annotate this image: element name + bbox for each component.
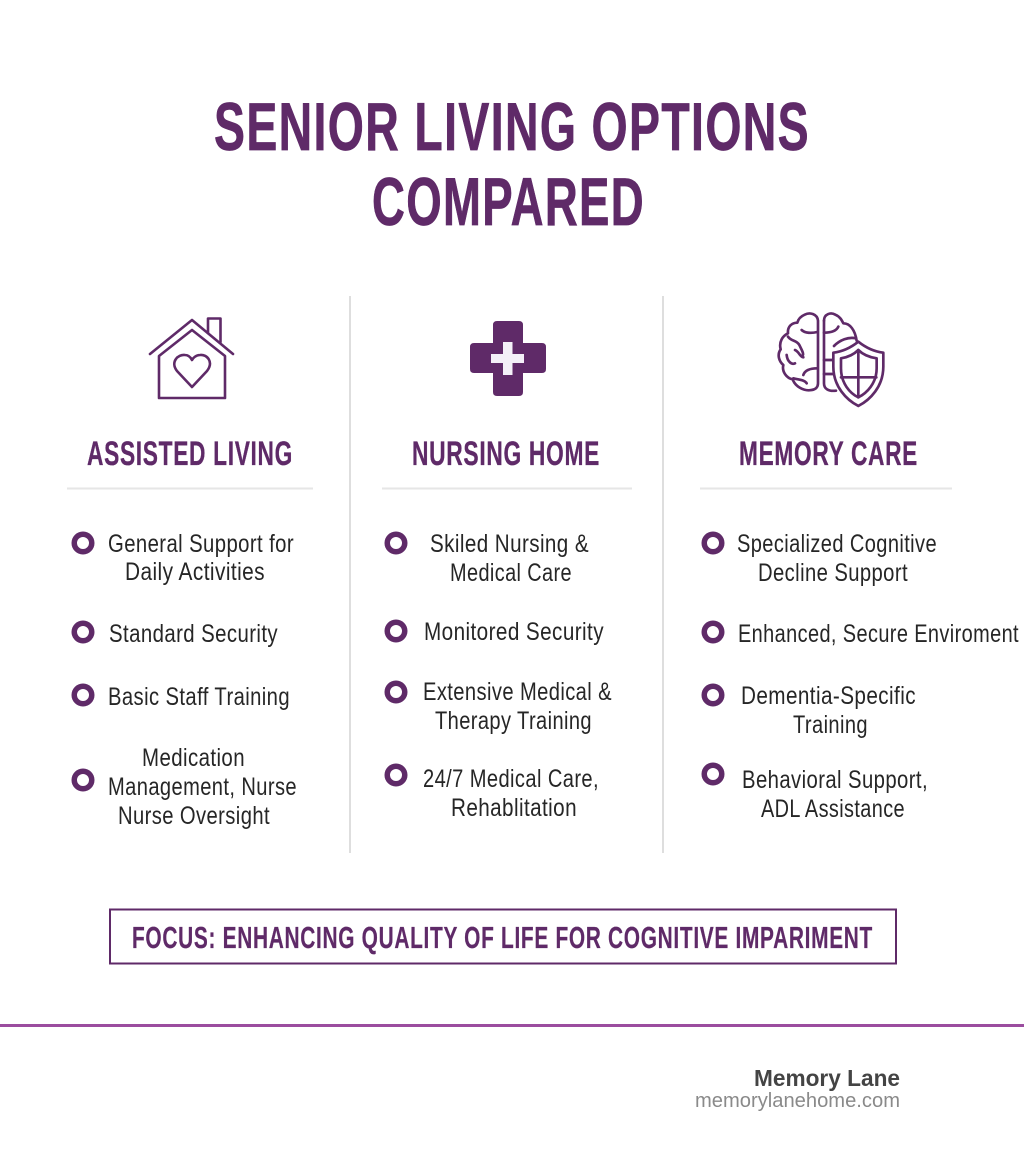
list item: medical care <box>387 765 599 822</box>
list item: behavioral support: ADL Assistance <box>761 795 905 823</box>
list item: dementia training <box>704 682 916 739</box>
title: COMPARED <box>372 164 645 240</box>
list item: behavioral support <box>704 765 928 823</box>
title <box>214 89 810 240</box>
list item: medical care: 24/7 Medical Care, <box>423 765 599 793</box>
list item: medication: Nurse Oversight <box>118 802 270 830</box>
list item: therapy training <box>387 678 612 735</box>
list item: medication: Management, Nurse <box>108 773 297 801</box>
list item: behavioral support: Behavioral Support, <box>742 766 928 794</box>
list item: skilled nursing: Medical Care <box>450 559 572 587</box>
list item: daily activities: General Support for <box>108 530 294 558</box>
list item: medication <box>74 744 297 830</box>
panel: assisted living <box>67 318 313 830</box>
list item: skilled nursing: Skiled Nursing & <box>430 530 589 558</box>
list item: skilled nursing <box>387 530 589 587</box>
footer brand: Memory Lane <box>754 1065 900 1091</box>
panel: nursing home <box>382 321 632 822</box>
footer brand: memorylanehome.com <box>695 1090 900 1112</box>
list item: medical care: Rehablitation <box>451 794 577 822</box>
list item: staff training: Basic Staff Training <box>108 683 290 711</box>
list item: daily activities: Daily Activities <box>125 558 265 586</box>
list item: therapy training: Therapy Training <box>435 707 592 735</box>
list item: cognitive support: Specialized Cognitive <box>737 530 937 558</box>
panel: memory care <box>700 314 1019 823</box>
list item: cognitive support: Decline Support <box>758 559 908 587</box>
list item: security: Standard Security <box>109 620 278 648</box>
list item: security: Monitored Security <box>424 618 604 646</box>
list item: security <box>74 620 278 648</box>
icon: medical cross <box>470 321 546 396</box>
list item: dementia training: Dementia-Specific <box>741 682 916 710</box>
icon: brain with shield <box>779 314 883 406</box>
list item: medication: Medication <box>142 744 245 772</box>
footer brand <box>695 1065 900 1112</box>
callout: focus <box>110 910 896 964</box>
list item: daily activities <box>74 530 294 586</box>
list item: cognitive support <box>704 530 937 587</box>
heading: assisted living: ASSISTED LIVING <box>87 435 293 473</box>
icon: house with heart <box>150 318 233 398</box>
heading: nursing home: NURSING HOME <box>412 435 600 473</box>
heading: memory care: MEMORY CARE <box>739 435 918 473</box>
list item: dementia training: Training <box>793 711 868 739</box>
list item: therapy training: Extensive Medical & <box>423 678 612 706</box>
